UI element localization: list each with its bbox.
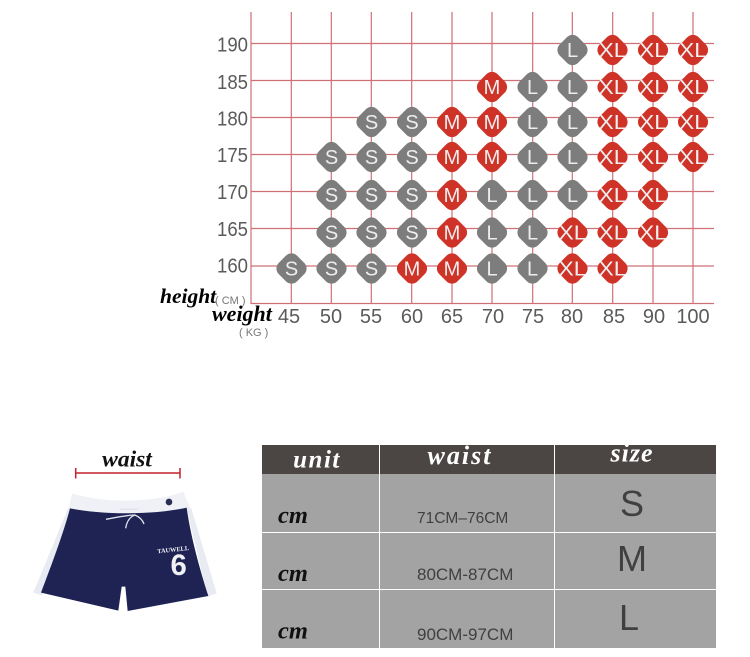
row: L xyxy=(278,597,639,644)
markers: height 175: XL xyxy=(679,147,707,169)
row: M: M xyxy=(617,538,647,579)
markers: height 165: S xyxy=(365,222,378,244)
markers: height 175 xyxy=(313,139,711,175)
markers: height 185: XL xyxy=(639,77,667,99)
weight axis labels: 100 xyxy=(676,306,710,328)
markers: height 175: M xyxy=(484,147,500,169)
shorts illustration xyxy=(33,492,217,611)
shorts: right side panel xyxy=(187,508,217,597)
markers: height 185: L xyxy=(527,77,538,99)
row: M xyxy=(278,538,647,587)
height axis labels: 170 xyxy=(217,182,248,204)
markers: height 175: XL xyxy=(639,147,667,169)
waist measurement label and bracket: waist xyxy=(102,446,153,472)
markers: height 175: L xyxy=(527,147,538,169)
table header labels: waist xyxy=(428,441,492,470)
height axis labels: 190 xyxy=(217,34,248,56)
markers: height 175: S xyxy=(365,147,378,169)
height axis labels: 175 xyxy=(217,145,248,167)
markers: height 170: S xyxy=(365,185,378,207)
shorts: number 6: 6 xyxy=(171,549,187,582)
weight axis labels: 90 xyxy=(643,306,665,328)
table header labels xyxy=(293,438,654,474)
markers: height 185: M xyxy=(484,77,500,99)
markers: height 170: L xyxy=(486,185,498,207)
axis title: weight (KG) xyxy=(212,301,273,339)
markers: height 180: S xyxy=(405,112,419,134)
markers: height 170: XL xyxy=(639,185,667,207)
height axis labels: 160 xyxy=(217,256,248,278)
row: S: cm xyxy=(278,502,308,529)
axis title: weight (KG): weight xyxy=(212,301,273,326)
markers: height 170: M xyxy=(444,185,460,207)
weight axis labels: 65 xyxy=(441,306,463,328)
markers: height 170: L xyxy=(527,185,538,207)
table body background xyxy=(262,474,716,648)
row: L: cm xyxy=(278,618,308,644)
table header background xyxy=(262,445,716,474)
height axis labels: 180 xyxy=(217,108,248,130)
markers: height 170: XL xyxy=(598,185,626,207)
weight axis labels: 80 xyxy=(561,306,583,328)
markers: height 180: L xyxy=(567,112,578,134)
height axis labels: 185 xyxy=(217,72,248,94)
table header labels: size xyxy=(610,438,654,468)
markers: height 180: XL xyxy=(679,112,707,134)
markers: height 180: M xyxy=(444,112,460,134)
weight axis labels: 50 xyxy=(320,306,342,328)
weight axis labels xyxy=(278,306,710,328)
markers: height 180: M xyxy=(484,112,500,134)
markers: height 185: XL xyxy=(598,77,626,99)
shorts: left side panel xyxy=(33,508,73,595)
markers: height 185: L xyxy=(567,77,578,99)
weight axis labels: 60 xyxy=(401,306,423,328)
markers: height 180: S xyxy=(365,112,378,134)
markers: height 160: XL xyxy=(598,258,626,280)
markers: height 165: M xyxy=(444,222,460,244)
markers: height 165: XL xyxy=(558,222,586,244)
shorts: waistband xyxy=(68,492,191,514)
axis title: height (CM) xyxy=(160,284,246,308)
markers: height 170: L xyxy=(567,185,578,207)
markers: height 160: XL xyxy=(558,258,586,280)
markers: height 175: S xyxy=(405,147,419,169)
markers: height 160: S xyxy=(325,258,338,280)
markers: height 165: S xyxy=(405,222,419,244)
markers: height 160 xyxy=(273,250,631,287)
markers: height 190: XL xyxy=(679,40,707,62)
markers: height 180: L xyxy=(527,112,538,134)
markers: height 160: M xyxy=(444,258,460,280)
height axis labels xyxy=(217,34,248,278)
markers: height 165: S xyxy=(325,222,338,244)
markers: height 185 xyxy=(474,69,711,105)
markers: height 175: L xyxy=(567,147,578,169)
row: L: L xyxy=(619,597,639,638)
markers: height 175: M xyxy=(444,147,460,169)
markers: height 190 xyxy=(554,32,711,68)
axis title: height (CM): ( CM ) xyxy=(215,295,246,307)
row: M: 80CM-87CM xyxy=(417,565,513,584)
weight axis labels: 55 xyxy=(360,306,382,328)
row: L: 90CM-97CM xyxy=(417,625,513,644)
markers: height 165: L xyxy=(486,222,498,244)
axis title: height (CM): height xyxy=(160,284,217,308)
markers: height 165: XL xyxy=(639,222,667,244)
waist size table xyxy=(262,438,716,648)
markers: height 175: XL xyxy=(598,147,626,169)
markers: height 190: XL xyxy=(598,40,626,62)
shorts: drawstring xyxy=(106,509,144,528)
table header labels: unit xyxy=(293,446,341,474)
markers: height 160: S xyxy=(365,258,378,280)
shorts: logo text: TAUWELL xyxy=(157,545,189,555)
markers: height 170 xyxy=(313,177,671,213)
markers: height 180: XL xyxy=(598,112,626,134)
weight axis labels: 75 xyxy=(522,306,544,328)
markers: height 160: L xyxy=(527,258,538,280)
markers: height 170: S xyxy=(325,185,338,207)
shorts: navy body xyxy=(41,508,208,611)
markers: height 170: S xyxy=(405,185,419,207)
row: S: 71CM–76CM xyxy=(417,510,508,527)
markers: height 165 xyxy=(313,214,671,251)
row: S: S xyxy=(620,483,644,524)
markers: height 160: L xyxy=(486,258,498,280)
weight axis labels: 85 xyxy=(603,306,625,328)
markers: height 185: XL xyxy=(679,77,707,99)
markers: height 165: XL xyxy=(598,222,626,244)
row: S xyxy=(278,483,644,529)
size chart: height and weight grid xyxy=(150,10,720,340)
row: M: cm xyxy=(278,560,308,587)
markers: height 165: L xyxy=(527,222,538,244)
weight axis labels: 45 xyxy=(278,306,300,328)
markers: height 190: XL xyxy=(639,40,667,62)
waist measurement label and bracket xyxy=(76,446,180,478)
shorts: waistband badge xyxy=(166,499,172,505)
markers: height 160: M xyxy=(404,258,420,280)
markers: height 190: L xyxy=(567,40,578,62)
markers: height 175: S xyxy=(325,147,338,169)
markers: height 180 xyxy=(353,104,711,140)
weight axis labels: 70 xyxy=(482,306,504,328)
height axis labels: 165 xyxy=(217,219,248,241)
markers: height 180: XL xyxy=(639,112,667,134)
axis title: weight (KG): ( KG ) xyxy=(239,327,268,339)
markers: height 160: S xyxy=(285,258,298,280)
